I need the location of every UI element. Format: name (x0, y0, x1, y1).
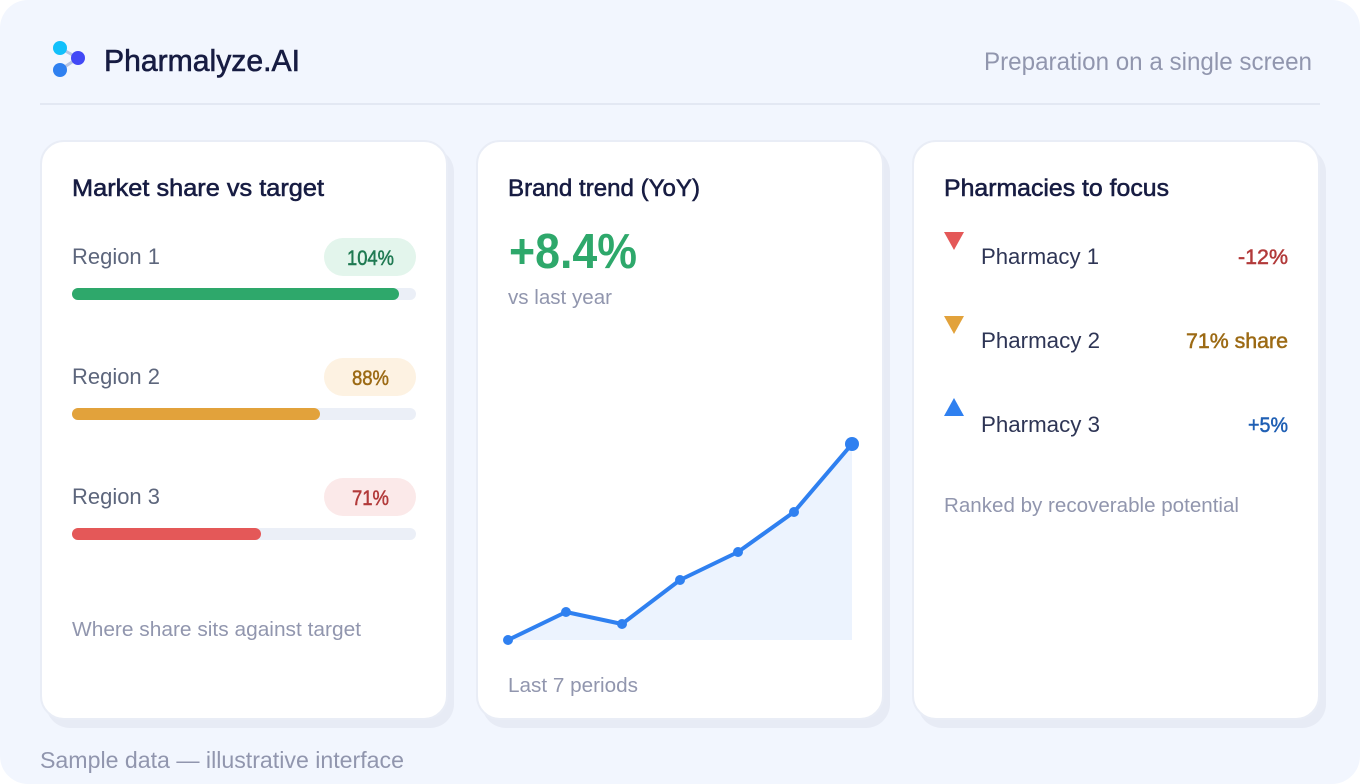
row: region 3 (72, 478, 416, 540)
row: region 2: 88% (352, 367, 389, 390)
panel: pharmacies to focus (913, 141, 1326, 728)
caption: market share: Where share sits against target (72, 619, 361, 641)
row: region 1: 104% (347, 247, 394, 270)
big number: +8.4% (509, 225, 637, 279)
row: pharmacy 1 (944, 232, 1288, 269)
row: pharmacy 1: -12% (1238, 246, 1288, 269)
brand name: Pharmalyze.AI (104, 43, 300, 78)
subcaption: vs last year (508, 287, 612, 309)
heading: brand trend: Brand trend (YoY) (508, 175, 700, 202)
row: pharmacy 3: +5% (1248, 414, 1288, 437)
row: region 3: 71% (352, 487, 389, 510)
row: pharmacy 2 (944, 316, 1288, 353)
row: region 1 (72, 238, 416, 300)
row: region 1: Region 1 (72, 244, 160, 269)
heading: pharmacies: Pharmacies to focus (944, 175, 1169, 202)
row: region 2: Region 2 (72, 364, 160, 389)
icon: logo (53, 41, 85, 77)
tagline: Preparation on a single screen (984, 48, 1312, 76)
row: pharmacy 3 (944, 398, 1288, 437)
footer note: Sample data — illustrative interface (40, 747, 404, 773)
header (53, 41, 1312, 78)
row: pharmacy 1: Pharmacy 1 (981, 244, 1099, 269)
row: region 2 (72, 358, 416, 420)
caption: brand trend: Last 7 periods (508, 675, 638, 697)
row: pharmacy 2: 71% share (1186, 330, 1288, 353)
panel: market share vs target (41, 141, 454, 728)
heading: market share: Market share vs target (72, 175, 324, 202)
caption: pharmacies: Ranked by recoverable potential (944, 495, 1239, 517)
line chart (503, 437, 859, 645)
row: region 3: Region 3 (72, 484, 160, 509)
row: pharmacy 3: Pharmacy 3 (981, 412, 1100, 437)
panel: brand trend (477, 141, 890, 728)
row: pharmacy 2: Pharmacy 2 (981, 328, 1100, 353)
